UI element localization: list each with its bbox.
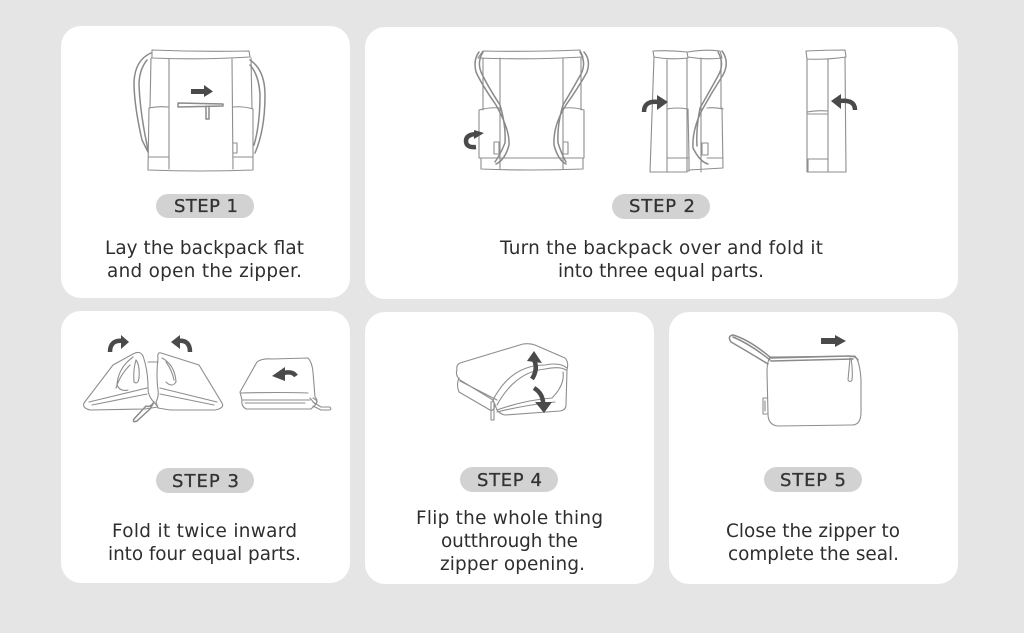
step 4 text xyxy=(416,508,603,575)
step 4 badge: STEP 4 xyxy=(477,470,542,491)
panel: step 1 xyxy=(61,26,350,298)
step 1 text: Lay the backpack flat xyxy=(105,238,304,259)
arrow: turn over xyxy=(466,130,484,147)
arrow: right fold xyxy=(171,335,190,352)
illustration: closed pouch xyxy=(729,335,861,426)
illustration: fold second third xyxy=(806,50,855,172)
step 2 badge: STEP 2 xyxy=(629,196,695,217)
panel: step 4 xyxy=(365,312,654,584)
step 3 text: Fold it twice inward xyxy=(112,521,297,542)
step 1 badge xyxy=(156,194,254,218)
step 1 text: and open the zipper. xyxy=(107,261,302,282)
step 5 text: Close the zipper to xyxy=(726,521,900,542)
step 1 text xyxy=(105,238,304,282)
step 1 badge: STEP 1 xyxy=(174,196,238,217)
step 5 badge xyxy=(764,467,862,492)
illustration: fold twice inward xyxy=(84,335,331,422)
step 4 text: Flip the whole thing xyxy=(416,508,603,529)
step 4 text: zipper opening. xyxy=(440,554,585,575)
arrow: left fold xyxy=(110,335,129,352)
step 5 text xyxy=(726,521,900,565)
step 5 text: complete the seal. xyxy=(728,544,899,565)
arrow: fold down xyxy=(272,367,296,381)
illustration: flip through zipper opening xyxy=(456,344,568,420)
arrow: fold inward xyxy=(831,94,855,110)
panel: step 2 xyxy=(365,27,958,299)
step 2 badge xyxy=(612,194,710,219)
step 3 text: into four equal parts. xyxy=(108,544,301,565)
step 2 text: into three equal parts. xyxy=(558,261,764,282)
arrow: flip down xyxy=(534,388,552,413)
step 5 badge: STEP 5 xyxy=(780,470,846,491)
arrow: flip up xyxy=(527,351,542,379)
arrow: fold over xyxy=(644,95,668,112)
step 3 badge: STEP 3 xyxy=(172,471,239,492)
step 3 text xyxy=(108,521,301,565)
panel: step 3 xyxy=(61,311,350,583)
step 3 badge xyxy=(156,468,254,493)
illustration: backpack turned over xyxy=(466,50,588,170)
step 2 text: Turn the backpack over and fold it xyxy=(499,238,823,259)
step 4 badge xyxy=(460,467,558,492)
illustration: open backpack with zipper xyxy=(134,50,265,171)
step 4 text: outthrough the xyxy=(441,531,578,552)
panel: step 5 xyxy=(669,312,958,584)
step 2 text xyxy=(499,238,823,282)
arrow: close zipper xyxy=(821,335,846,347)
arrow: zipper direction xyxy=(191,85,213,97)
illustration: fold one third xyxy=(644,50,726,172)
